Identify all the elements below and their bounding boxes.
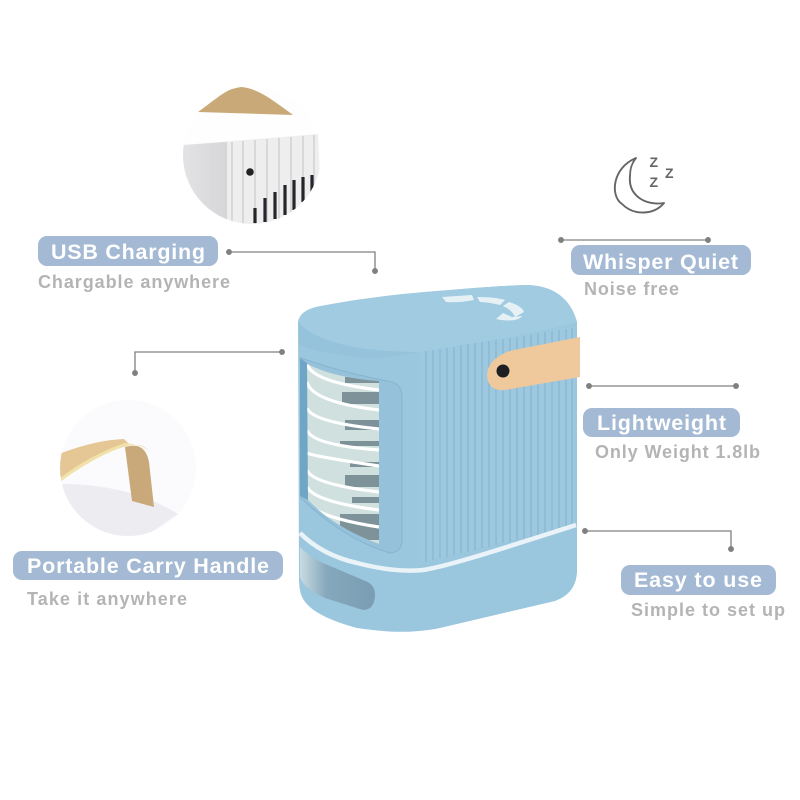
label: Whisper Quiet: Whisper Quiet [583, 250, 738, 274]
icon: moon and zzz: Z [665, 165, 674, 181]
ribbed side panel [420, 326, 575, 563]
fan frame recess [301, 358, 402, 553]
inset: carry handle close-up [60, 439, 178, 536]
caption: Simple to set up: Simple to set up [631, 600, 785, 620]
lid top surface [298, 285, 577, 352]
product: portable air cooler [298, 285, 577, 632]
label: Lightweight: Lightweight [597, 411, 726, 435]
leather handle [487, 337, 580, 390]
icon: moon and zzz [615, 154, 674, 213]
inset: USB port close-up [183, 86, 322, 224]
label: Easy to use [621, 565, 776, 595]
fan louvers [307, 364, 379, 544]
cooler body [298, 285, 577, 632]
white base stripe [300, 525, 576, 571]
label: Portable Carry Handle: Portable Carry Handle [27, 554, 269, 578]
icon: moon and zzz: Z [650, 154, 658, 170]
caption: Chargable anywhere: Chargable anywhere [38, 272, 230, 292]
label: Easy to use: Easy to use [634, 568, 762, 592]
caption: Only Weight 1.8lb: Only Weight 1.8lb [595, 442, 760, 462]
connector: Easy to use [583, 529, 733, 551]
water tank window [300, 547, 375, 610]
lid front edge [299, 323, 420, 358]
connector: USB Charging [227, 250, 377, 273]
icon: moon and zzz: Z [650, 174, 658, 190]
label: USB Charging: USB Charging [51, 240, 205, 264]
connector: Whisper Quiet [559, 238, 710, 242]
connector: Portable Carry Handle [133, 350, 284, 375]
lid indicator lights [442, 295, 524, 320]
connector: Lightweight [587, 384, 738, 388]
label: Whisper Quiet [571, 245, 751, 275]
label: USB Charging [38, 236, 218, 266]
caption: Take it anywhere: Take it anywhere [27, 589, 187, 609]
caption: Noise free: Noise free [584, 279, 679, 299]
label: Lightweight [583, 408, 740, 437]
